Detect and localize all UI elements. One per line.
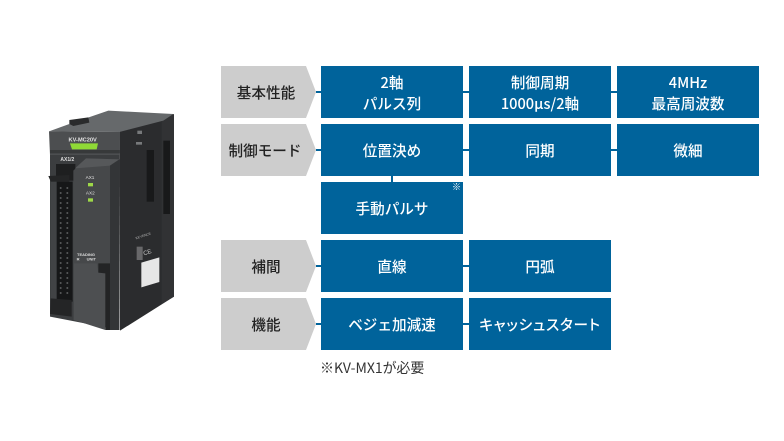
- front top block: [49, 131, 119, 155]
- box: 制御周期 1000µs/2軸: 1000µs/2軸: [501, 92, 579, 114]
- box: 同期: [469, 124, 611, 176]
- LEDs: AX1: [86, 175, 95, 180]
- box: 円弧: 円弧: [525, 256, 555, 277]
- box: 円弧: [469, 240, 611, 292]
- box: 直線: 直線: [377, 256, 407, 277]
- teaching label: TEADING: [77, 252, 95, 257]
- front panel: [73, 158, 119, 330]
- side slots: [147, 150, 154, 202]
- row label: 機能: [221, 298, 316, 350]
- box: 位置決め: 位置決め: [363, 140, 421, 161]
- footnote: ※KV-MX1が必要: [320, 358, 424, 378]
- row label: 機能: 機能: [251, 314, 281, 335]
- box: 2軸 パルス列: [321, 66, 463, 118]
- icon: KV-MC20V motion control unit product: R: [77, 257, 80, 262]
- icon: KV-MC20V motion control unit product: AX2: [86, 191, 95, 196]
- box: 2軸 パルス列: 2軸: [381, 72, 403, 92]
- box: 微細: 微細: [673, 140, 703, 161]
- top face: [49, 111, 173, 132]
- box: 制御周期 1000µs/2軸: 制御周期: [511, 72, 569, 92]
- icon: KV-MC20V motion control unit product: CE: [143, 249, 153, 257]
- connector: [48, 164, 75, 317]
- row label: 基本性能: [221, 66, 316, 118]
- side face: [119, 114, 174, 331]
- box: 4MHz 最高周波数: 最高周波数: [652, 92, 724, 114]
- box: ベジェ加減速: ベジェ加減速: [348, 314, 436, 335]
- row label: 制御モード: 制御モード: [228, 140, 301, 161]
- box: 位置決め: [321, 124, 463, 176]
- row label: 補間: 補間: [251, 256, 281, 277]
- side label: KEYENCE: [135, 231, 152, 240]
- box: 2軸 パルス列: パルス列: [363, 92, 421, 114]
- row label: 基本性能: 基本性能: [237, 82, 295, 103]
- front lower body: [50, 155, 119, 330]
- box: 微細: [617, 124, 759, 176]
- box: 手動パルサ: 手動パルサ: [356, 198, 428, 219]
- model label: KV-MC20V: [69, 137, 97, 143]
- box: キャッシュスタート: [469, 298, 611, 350]
- icon: KV-MC20V motion control unit product: AX1/2: [60, 157, 74, 163]
- box: キャッシュスタート: キャッシュスタート: [479, 314, 601, 335]
- box: 4MHz 最高周波数: 4MHz: [669, 72, 707, 92]
- row label: 補間: [221, 240, 316, 292]
- box: ベジェ加減速: [321, 298, 463, 350]
- box: 手動パルサ: ※: [452, 180, 461, 193]
- box: 手動パルサ: [321, 182, 463, 234]
- icon: KV-MC20V motion control unit product: [48, 110, 174, 331]
- box: 直線: [321, 240, 463, 292]
- box: 4MHz 最高周波数: [617, 66, 759, 118]
- door: [74, 263, 105, 330]
- box: 制御周期 1000µs/2軸: [469, 66, 611, 118]
- icon: KV-MC20V motion control unit product: UNIT: [87, 257, 97, 262]
- green indicator: [70, 143, 98, 149]
- row label: 制御モード: [221, 124, 316, 176]
- box: 同期: 同期: [525, 140, 555, 161]
